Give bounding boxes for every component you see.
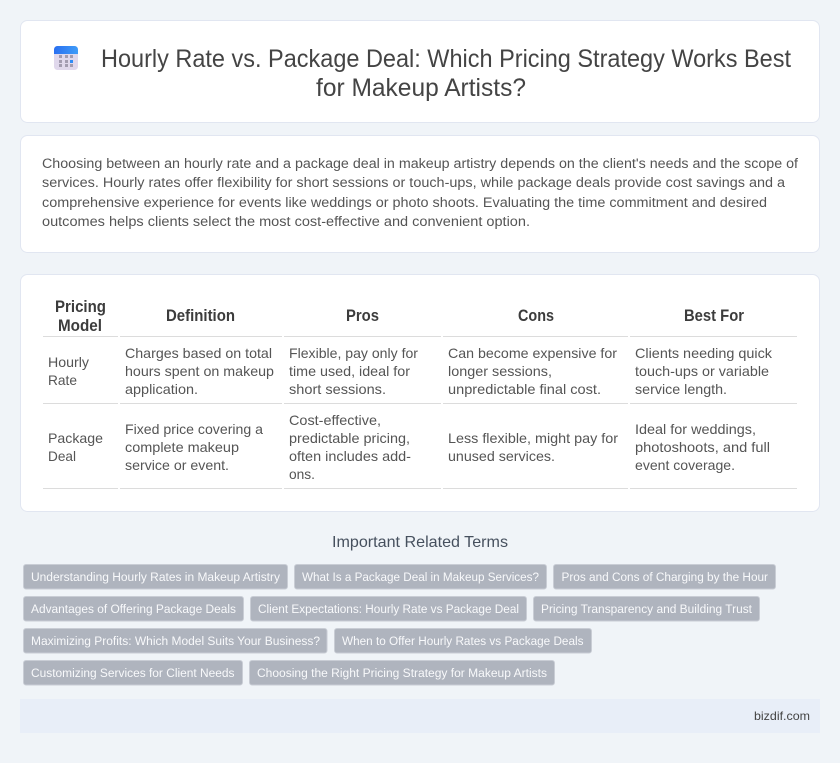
tag — [534, 596, 760, 621]
table row: hourly rate: hours spent on makeup — [125, 363, 274, 379]
tag: Understanding Hourly Rates in Makeup Artistry — [31, 570, 281, 584]
intro text: Choosing between an hourly rate and a package deal in makeup artistry depends on the client's needs and the scope of — [42, 156, 798, 172]
table row: hourly rate: short sessions. — [289, 381, 386, 397]
tag — [334, 628, 592, 653]
table row: package deal: photoshoots, and full — [635, 439, 770, 455]
table row: package deal — [48, 412, 770, 482]
table row: package deal: Ideal for weddings, — [635, 421, 756, 437]
tag — [250, 660, 554, 685]
tag: Maximizing Profits: Which Model Suits Your Business? — [31, 634, 320, 648]
tag: What Is a Package Deal in Makeup Services? — [302, 570, 539, 584]
title — [101, 45, 791, 102]
tag — [554, 564, 776, 589]
tag: Client Expectations: Hourly Rate vs Package Deal — [258, 602, 519, 616]
footer — [20, 699, 820, 733]
tag: Choosing the Right Pricing Strategy for Makeup Artists — [257, 666, 547, 680]
title: for Makeup Artists? — [316, 74, 526, 102]
tag — [24, 660, 242, 685]
table header row: Best For — [684, 307, 745, 325]
table row: hourly rate: Charges based on total — [125, 345, 272, 361]
table row: package deal: Deal — [48, 448, 76, 464]
table row: hourly rate: touch-ups or variable — [635, 363, 769, 379]
panel: comparison table — [20, 274, 820, 512]
related term tags — [24, 564, 776, 685]
table row: package deal: service or event. — [125, 457, 229, 473]
heading: important related terms: Important Related Terms — [332, 534, 508, 551]
title: Hourly Rate vs. Package Deal: Which Pricing Strategy Works Best — [101, 45, 791, 73]
table row: package deal: Package — [48, 430, 103, 446]
table row: hourly rate: Hourly — [48, 354, 89, 370]
panel: title header — [20, 20, 820, 122]
tag — [294, 564, 546, 589]
table row: hourly rate: longer sessions, — [448, 363, 552, 379]
table row: hourly rate: Flexible, pay only for — [289, 345, 418, 361]
table row: package deal: ons. — [289, 466, 315, 482]
intro text: outcomes helps clients select the most cost-effective and convenient option. — [42, 214, 530, 230]
tag — [250, 596, 526, 621]
tag — [24, 596, 244, 621]
table row: hourly rate — [48, 345, 773, 397]
table row: hourly rate: Can become expensive for — [448, 345, 617, 361]
icon: calendar — [54, 46, 78, 70]
tag — [24, 564, 288, 589]
table row: hourly rate: Rate — [48, 372, 77, 388]
table rules — [43, 336, 797, 489]
table header row: Model — [58, 317, 102, 335]
tag — [24, 628, 327, 653]
table row: package deal: complete makeup — [125, 439, 239, 455]
tag: Customizing Services for Client Needs — [31, 666, 234, 680]
table row: hourly rate: service length. — [635, 381, 727, 397]
tag: When to Offer Hourly Rates vs Package Deals — [342, 634, 584, 648]
table row: package deal: predictable pricing, — [289, 430, 410, 446]
table row: package deal: Less flexible, might pay for — [448, 430, 618, 446]
panel: introduction — [20, 136, 820, 252]
table header row: Cons — [518, 307, 554, 325]
tag: Pricing Transparency and Building Trust — [541, 602, 753, 616]
intro text — [42, 156, 798, 230]
table row: hourly rate: unpredictable final cost. — [448, 381, 601, 397]
table header row — [55, 298, 745, 335]
table header row: Definition — [166, 307, 235, 325]
table row: package deal: event coverage. — [635, 457, 735, 473]
table header row: Pricing — [55, 298, 106, 316]
table row: package deal: often includes add- — [289, 448, 411, 464]
table row: hourly rate: Clients needing quick — [635, 345, 773, 361]
intro text: comprehensive experience for events like weddings or photo shoots. Evaluating the time commitment and desired — [42, 195, 767, 211]
footer: bizdif.com — [754, 709, 810, 723]
table row: hourly rate: time used, ideal for — [289, 363, 410, 379]
table header row: Pros — [346, 307, 379, 325]
table row: package deal: Cost-effective, — [289, 412, 381, 428]
tag: Advantages of Offering Package Deals — [31, 602, 236, 616]
tag: Pros and Cons of Charging by the Hour — [562, 570, 768, 584]
table row: hourly rate: application. — [125, 381, 198, 397]
table row: package deal: Fixed price covering a — [125, 421, 263, 437]
table row: package deal: unused services. — [448, 448, 555, 464]
intro text: services. Hourly rates offer flexibility for short sessions or touch-ups, while package deals provide cost savings and a — [42, 175, 785, 191]
